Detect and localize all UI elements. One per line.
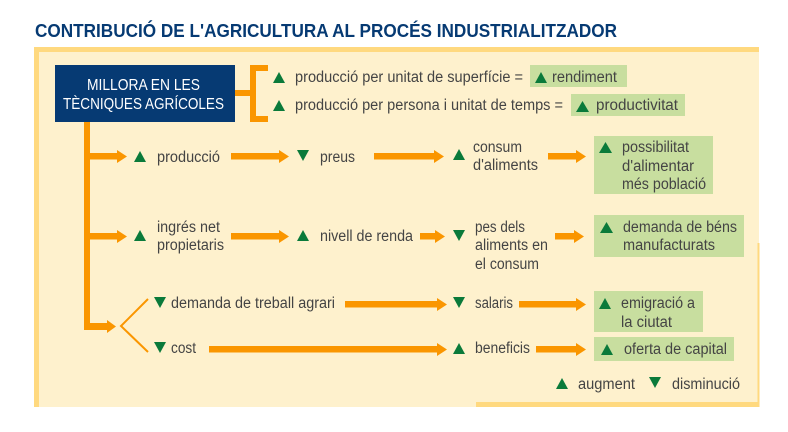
row: producció: d'alimentar bbox=[622, 158, 694, 175]
row: producció: producció bbox=[157, 149, 220, 166]
row: demanda de treball agrari bbox=[154, 291, 703, 332]
row: ingrés net propietaris: pes dels bbox=[475, 219, 525, 236]
row: ingrés net propietaris: aliments en bbox=[475, 237, 548, 254]
row: demanda de treball agrari: salaris bbox=[475, 295, 513, 312]
title: CONTRIBUCIÓ DE L'AGRICULTURA AL PROCÉS INDUSTRIALITZADOR bbox=[35, 20, 617, 41]
legend: augment bbox=[578, 376, 636, 393]
bracket bbox=[235, 65, 268, 122]
definition: productivitat: producció per persona i unitat de temps = bbox=[295, 97, 563, 114]
panel: background bbox=[34, 47, 760, 407]
row: cost: oferta de capital bbox=[624, 341, 727, 358]
row: demanda de treball agrari: demanda de treball agrari bbox=[171, 295, 335, 312]
heading box: millora en les tècniques agrícoles bbox=[55, 65, 235, 122]
row: cost bbox=[154, 337, 734, 361]
definition: productivitat: productivitat bbox=[596, 97, 679, 114]
main connector trunk bbox=[84, 122, 116, 333]
definition: rendiment: rendiment bbox=[552, 69, 618, 86]
row: producció: consum bbox=[473, 139, 522, 156]
row: ingrés net propietaris bbox=[90, 215, 744, 273]
row: cost: cost bbox=[171, 340, 197, 357]
row: producció bbox=[90, 136, 713, 194]
definition: productivitat bbox=[273, 94, 685, 116]
definition: rendiment bbox=[273, 65, 627, 87]
row: ingrés net propietaris: el consum bbox=[475, 256, 539, 273]
row: cost: beneficis bbox=[475, 340, 530, 357]
row: demanda de treball agrari: la ciutat bbox=[621, 314, 673, 331]
row: ingrés net propietaris: ingrés net bbox=[157, 219, 221, 236]
row: demanda de treball agrari: emigració a bbox=[621, 295, 695, 312]
heading box: millora en les tècniques agrícoles: MILLORA EN LES bbox=[87, 77, 200, 94]
row: ingrés net propietaris: propietaris bbox=[157, 237, 224, 254]
row: producció: més població bbox=[622, 176, 706, 193]
row: producció: preus bbox=[320, 149, 355, 166]
row: producció: possibilitat bbox=[622, 139, 690, 156]
legend bbox=[556, 376, 740, 393]
row: ingrés net propietaris: demanda de béns bbox=[623, 219, 737, 236]
definition: rendiment: producció per unitat de superfície = bbox=[295, 69, 523, 86]
row: ingrés net propietaris: manufacturats bbox=[623, 237, 715, 254]
row: producció: d'aliments bbox=[473, 157, 538, 174]
fork connector bbox=[121, 299, 148, 352]
row: ingrés net propietaris: nivell de renda bbox=[320, 228, 413, 245]
legend: disminució bbox=[672, 376, 740, 393]
heading box: millora en les tècniques agrícoles: TÈCNIQUES AGRÍCOLES bbox=[63, 96, 224, 113]
